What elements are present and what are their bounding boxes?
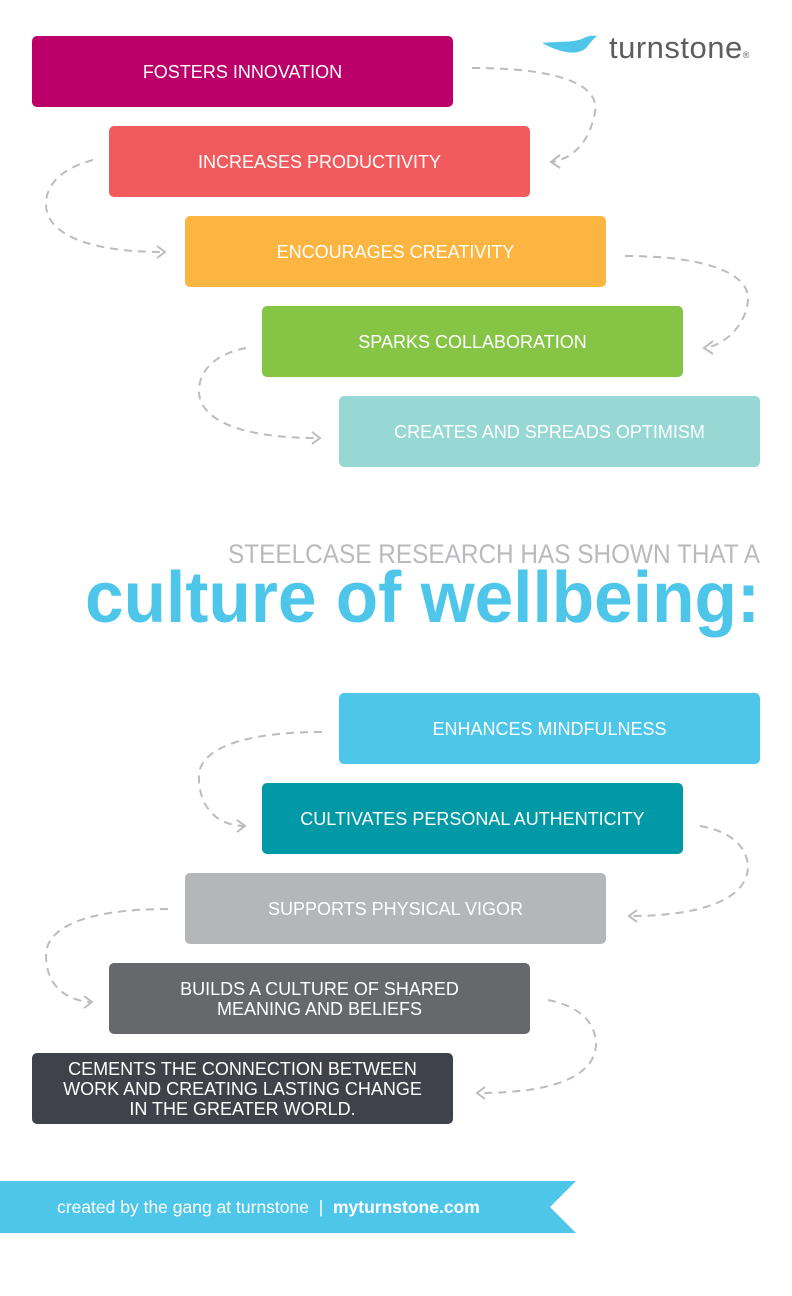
box: mindfulness: ENHANCES MINDFULNESS	[432, 718, 667, 738]
box: shared meaning	[109, 963, 530, 1034]
box: lasting change: IN THE GREATER WORLD.	[129, 1098, 356, 1118]
box: encourages creativity: ENCOURAGES CREATIVITY	[277, 242, 514, 262]
box: physical vigor	[185, 873, 606, 944]
box: encourages creativity	[185, 216, 606, 287]
box: shared meaning: MEANING AND BELIEFS	[217, 998, 422, 1018]
box: lasting change: WORK AND CREATING LASTING CHANGE	[63, 1078, 422, 1098]
footer text: created by the gang at turnstone | myturnstone.com	[57, 1197, 480, 1217]
footer ribbon	[0, 1181, 576, 1233]
heading	[85, 539, 760, 638]
box: lasting change: CEMENTS THE CONNECTION BETWEEN	[68, 1058, 417, 1078]
box: sparks collaboration	[262, 306, 683, 377]
box: authenticity: CULTIVATES PERSONAL AUTHENTICITY	[300, 808, 645, 828]
logo: turnstone	[542, 30, 750, 65]
box: optimism: CREATES AND SPREADS OPTIMISM	[394, 422, 705, 442]
box: increases productivity	[109, 126, 530, 197]
box: physical vigor: SUPPORTS PHYSICAL VIGOR	[268, 898, 523, 918]
main title: culture of wellbeing:	[85, 558, 760, 638]
box: lasting change	[32, 1053, 453, 1124]
box: mindfulness	[339, 693, 760, 764]
box: shared meaning: BUILDS A CULTURE OF SHARED	[180, 978, 459, 998]
box: sparks collaboration: SPARKS COLLABORATION	[358, 332, 587, 352]
box: increases productivity: INCREASES PRODUCTIVITY	[198, 152, 441, 172]
box: optimism	[339, 396, 760, 467]
box: fosters innovation: FOSTERS INNOVATION	[143, 62, 342, 82]
logo text: turnstone®	[609, 30, 750, 65]
box: fosters innovation	[32, 36, 453, 107]
box: authenticity	[262, 783, 683, 854]
icon: bird	[542, 36, 597, 53]
